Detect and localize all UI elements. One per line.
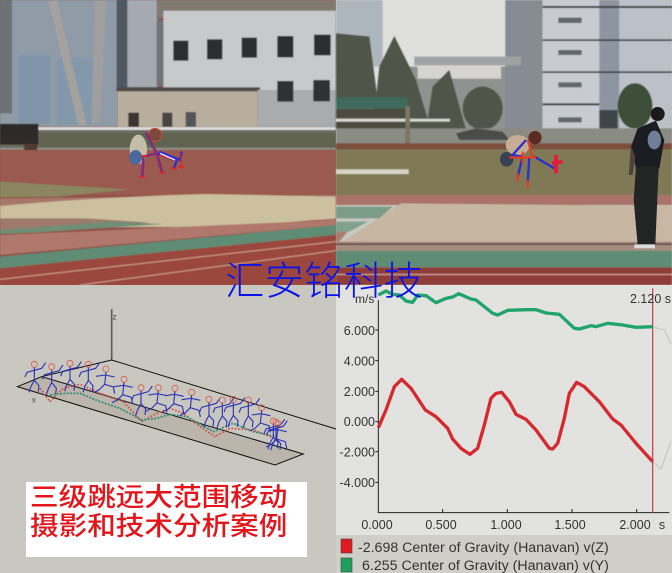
white building	[117, 11, 336, 127]
axes	[378, 300, 669, 513]
panel: left track photo	[0, 0, 336, 285]
left photo backdrop	[0, 0, 336, 285]
unit label: m/s	[355, 292, 374, 306]
legend strip	[336, 535, 672, 573]
watermark heading: 汇安铭科技	[225, 250, 423, 307]
back rail	[42, 360, 336, 429]
z axis	[109, 309, 114, 360]
distant towers	[336, 0, 672, 140]
title text: 三级跳远大范围移动	[30, 476, 287, 514]
x axis labels: 2.000	[619, 518, 651, 532]
x axis labels: 0.500	[425, 518, 457, 532]
y axis labels: 2.000	[344, 385, 375, 399]
axis ticks	[375, 330, 637, 513]
z axis label: z	[113, 312, 117, 321]
legend: v(Z): -2.698 Center of Gravity (Hanavan) v(Z)	[358, 540, 609, 556]
sky	[336, 0, 560, 143]
skeleton sequence	[25, 360, 287, 450]
green trajectory	[50, 393, 277, 437]
y axis labels: -4.000	[340, 476, 375, 490]
y axis labels	[340, 324, 375, 490]
shelter and fence	[336, 97, 672, 193]
cursor time label: 2.120 s	[630, 292, 671, 306]
y axis labels: 4.000	[344, 354, 375, 368]
red trajectory	[40, 384, 277, 439]
panel: 3D skeleton view	[0, 285, 336, 573]
y axis labels: 6.000	[344, 324, 375, 338]
jumper with skeleton overlay	[129, 128, 184, 177]
x axis labels: 0.000	[361, 518, 393, 532]
x axis labels: s	[659, 518, 665, 532]
fence and hedge	[0, 124, 336, 167]
field and pit	[336, 143, 672, 285]
cursor line	[651, 288, 655, 513]
chart background	[336, 285, 672, 535]
landing plate	[17, 377, 303, 465]
title box	[26, 476, 307, 557]
panel background	[0, 285, 336, 573]
y axis labels: -2.000	[340, 446, 375, 460]
red runway and grass	[0, 150, 336, 285]
panel: velocity line chart	[336, 285, 672, 573]
jumper with skeleton overlay	[500, 131, 563, 188]
subtitle text: 摄影和技术分析案例	[30, 505, 287, 543]
x axis label: x	[32, 394, 37, 404]
v(Z) red curve	[378, 379, 653, 462]
x axis labels: 1.000	[490, 518, 522, 532]
x axis labels	[361, 518, 665, 532]
faded continuation	[653, 327, 671, 469]
y axis labels: 0.000	[344, 415, 375, 429]
x axis labels: 1.500	[554, 518, 586, 532]
trees	[336, 33, 652, 130]
v(Y) green curve	[378, 291, 653, 329]
panel: right track photo	[336, 0, 672, 285]
left tower building	[0, 0, 336, 127]
standing coach	[629, 107, 665, 248]
